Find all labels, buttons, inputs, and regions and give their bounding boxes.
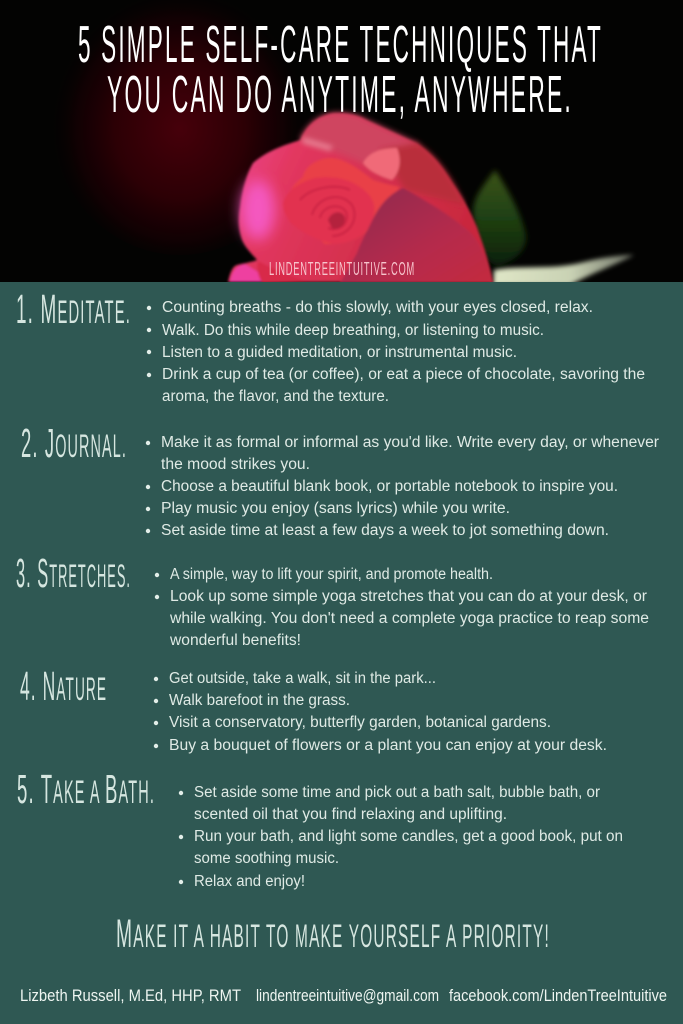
section 2: Journal — [21, 420, 659, 539]
bullet list: meditate: Listen to a guided meditation, or instrumental music. — [162, 344, 517, 361]
website label: LINDENTREEINTUITIVE.COM — [269, 259, 415, 279]
section 3: Stretches: 3. STRETCHES. — [16, 550, 131, 596]
bullet list: bath: Set aside some time and pick out a bath salt, bubble bath, or — [194, 784, 600, 801]
bullet list: journal: Set aside time at least a few days a week to jot something down. — [161, 522, 609, 539]
bullet list: journal: Play music you enjoy (sans lyrics) while you write. — [161, 500, 510, 517]
icon: pale stem — [493, 255, 634, 285]
bullet list: nature: Get outside, take a walk, sit in the park... — [169, 670, 436, 687]
header photo: rose on black — [0, 0, 683, 285]
bullet list: journal: Choose a beautiful blank book, or portable notebook to inspire you. — [161, 478, 618, 495]
bullet list: journal: Make it as formal or informal as you'd like. Write every day, or whenever — [161, 434, 659, 451]
bullet list: journal — [146, 434, 659, 539]
bullet list: bath — [179, 784, 623, 890]
section 1: Meditate — [16, 286, 645, 405]
bullet list: bath: some soothing music. — [194, 850, 339, 867]
heading: 1. Meditate: 1. MEDITATE. — [16, 286, 131, 332]
heading: 5. Take a Bath: 5. TAKE A BATH. — [17, 766, 155, 812]
heading: 4. Nature: 4. NATURE — [20, 663, 107, 709]
bullet list: bath: Run your bath, and light some candles, get a good book, put on — [194, 828, 623, 845]
title — [78, 16, 603, 124]
bullet list: stretches: Look up some simple yoga stretches that you can do at your desk, or — [170, 588, 647, 605]
bullet list: bath: Relax and enjoy! — [194, 873, 305, 890]
bullet list: meditate — [147, 299, 645, 405]
bullet list: stretches — [155, 566, 649, 649]
bullet list: stretches: while walking. You don't need a complete yoga practice to reap some — [169, 610, 649, 627]
bullet list: meditate: Walk. Do this while deep breathing, or listening to music. — [162, 322, 544, 339]
bullet list: nature: Visit a conservatory, butterfly garden, botanical gardens. — [169, 714, 551, 731]
bullet list: meditate: Drink a cup of tea (or coffee), or eat a piece of chocolate, savoring the — [162, 366, 645, 383]
bullet list: stretches: A simple, way to lift your spirit, and promote health. — [170, 566, 493, 583]
bullet list: journal: the mood strikes you. — [161, 456, 310, 473]
bullet list: bath: scented oil that you find relaxing and uplifting. — [194, 806, 507, 823]
icon: rose bloom — [228, 113, 493, 283]
icon: green leaf — [473, 170, 526, 266]
section 4: Nature — [20, 663, 607, 754]
bullet list: nature: Buy a bouquet of flowers or a plant you can enjoy at your desk. — [169, 737, 607, 754]
footer contact line: Lizbeth Russell, M.Ed, HHP, RMT — [20, 986, 241, 1005]
bullet list: nature: Walk barefoot in the grass. — [169, 692, 350, 709]
bullet list: nature — [154, 670, 607, 754]
section 5: Take a Bath — [17, 766, 623, 890]
bullet list: meditate: aroma, the flavor, and the texture. — [162, 388, 389, 405]
footer contact line — [20, 986, 667, 1005]
bullet list: stretches: wonderful benefits! — [169, 632, 301, 649]
bullet list: meditate: Counting breaths - do this slowly, with your eyes closed, relax. — [162, 299, 593, 316]
section 3: Stretches — [16, 550, 649, 649]
footer contact line: lindentreeintuitive@gmail.com — [256, 986, 439, 1005]
heading: 2. Journal: 2. JOURNAL. — [21, 420, 127, 466]
